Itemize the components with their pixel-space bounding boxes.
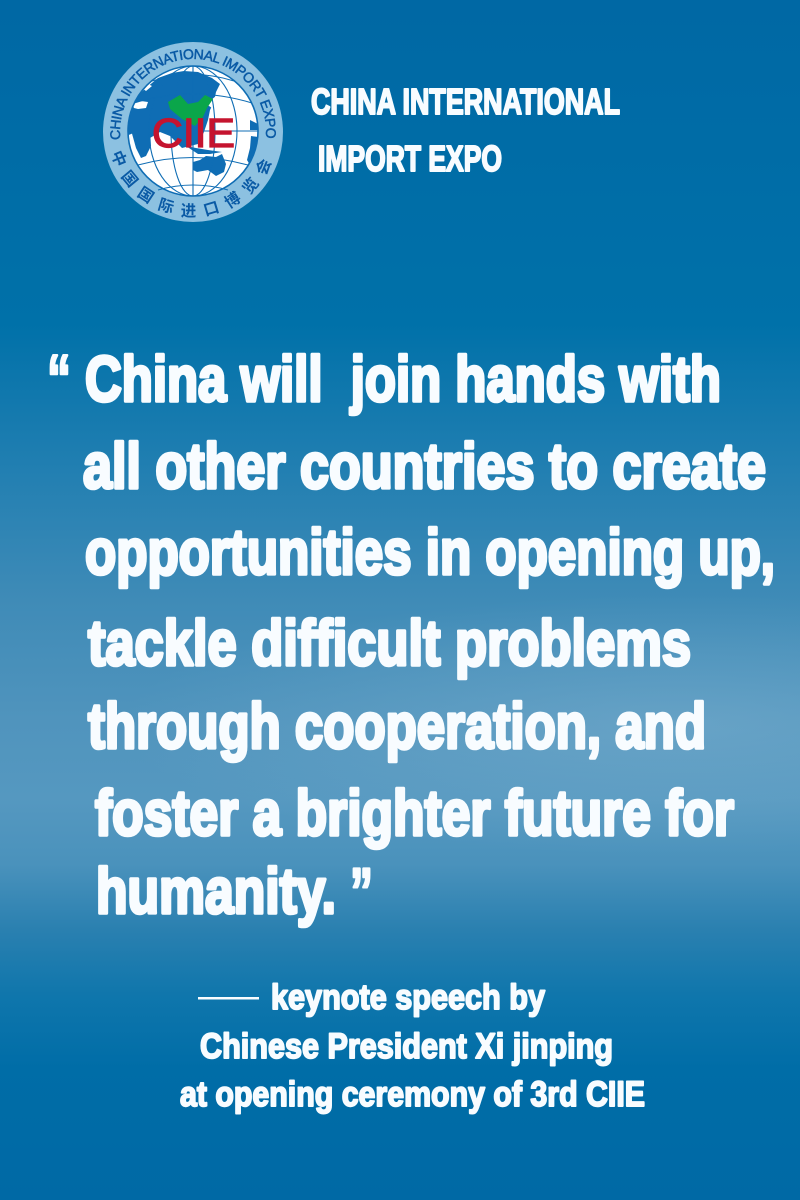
logo ring text: Chinese: 中国国际进口博览会 (112, 150, 272, 218)
opening quotation mark: “ (47, 341, 71, 415)
logo CIIE letters: CIIE (152, 110, 235, 156)
background light glow (120, 595, 800, 855)
attribution line 1: keynote speech by (271, 978, 545, 1017)
globe continents (126, 71, 220, 148)
attribution line 2: Chinese President Xi jinping (200, 1027, 613, 1066)
logo globe (126, 66, 258, 196)
logo: CIIE globe emblem (103, 42, 283, 222)
logo outer ring (103, 42, 283, 222)
closing quotation mark: ” (350, 854, 373, 928)
attribution dash (198, 997, 259, 1000)
attribution (180, 978, 645, 1114)
header title (311, 81, 620, 179)
main quote (47, 341, 775, 928)
attribution line 3: at opening ceremony of 3rd CIIE (180, 1075, 645, 1114)
globe grid lines (128, 66, 258, 196)
logo ring text: English: CHINA INTERNATIONAL IMPORT EXPO (110, 49, 276, 140)
quote line 7: humanity. (96, 855, 336, 927)
logo China map in green (168, 95, 213, 126)
header line 1: CHINA INTERNATIONAL (311, 81, 620, 122)
header line 2: IMPORT EXPO (318, 138, 502, 179)
